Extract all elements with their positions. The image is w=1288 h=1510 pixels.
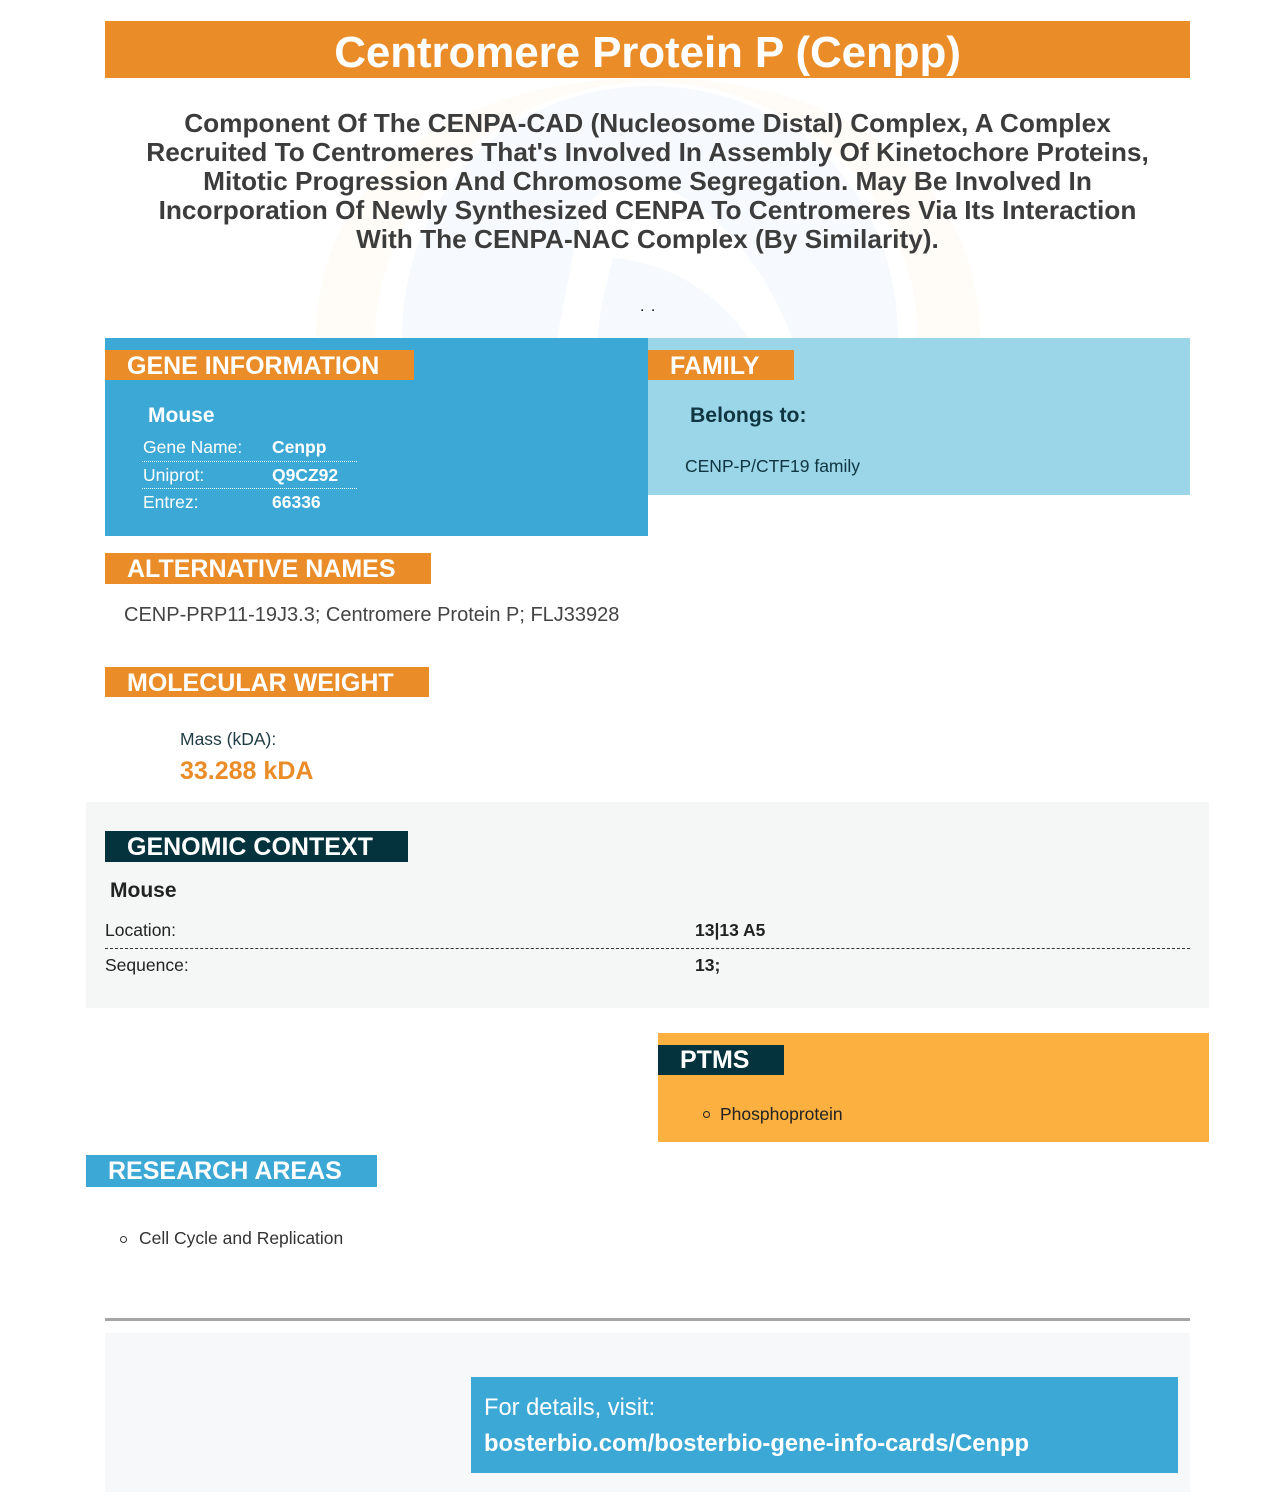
mass value: 33.288 kDA bbox=[180, 757, 313, 785]
ptm item: Phosphoprotein bbox=[720, 1104, 843, 1124]
heading: ptms: PTMS bbox=[680, 1046, 749, 1074]
panel: family bbox=[648, 338, 1190, 495]
callout label: For details, visit: bbox=[484, 1395, 655, 1421]
heading: family bbox=[648, 350, 794, 380]
entrez row: Entrez: bbox=[143, 492, 198, 512]
uniprot row: Q9CZ92 bbox=[272, 465, 338, 485]
panel: genomic context bbox=[86, 802, 1209, 1008]
gene name row bbox=[142, 434, 357, 462]
panel: footer bbox=[105, 1333, 1190, 1492]
species label: Mouse bbox=[148, 404, 215, 427]
callout url: bosterbio.com/bosterbio-gene-info-cards/Cenpp bbox=[484, 1430, 1029, 1457]
description bbox=[146, 108, 1149, 254]
ptm bullet bbox=[703, 1111, 710, 1118]
heading: genomic context: GENOMIC CONTEXT bbox=[127, 833, 373, 861]
uniprot row bbox=[142, 462, 357, 489]
callout: details link bbox=[471, 1377, 1178, 1473]
description: Mitotic Progression And Chromosome Segregation. May Be Involved In bbox=[203, 166, 1092, 196]
title banner bbox=[105, 21, 1190, 78]
location row bbox=[105, 916, 1190, 949]
belongs to label: Belongs to: bbox=[690, 404, 807, 427]
family name: CENP-P/CTF19 family bbox=[685, 456, 860, 476]
heading: gene information: GENE INFORMATION bbox=[127, 352, 379, 380]
gene name row: Cenpp bbox=[272, 437, 326, 457]
species label: Mouse bbox=[110, 879, 177, 902]
footer rule bbox=[105, 1318, 1190, 1321]
entrez row: 66336 bbox=[272, 492, 321, 512]
location row: 13|13 A5 bbox=[695, 920, 765, 940]
title banner: Centromere Protein P (Cenpp) bbox=[334, 28, 961, 77]
heading: molecular weight: MOLECULAR WEIGHT bbox=[127, 669, 394, 697]
description: Recruited To Centromeres That's Involved In Assembly Of Kinetochore Proteins, bbox=[146, 137, 1149, 167]
separator dots: . . bbox=[640, 298, 655, 315]
heading: research areas: RESEARCH AREAS bbox=[108, 1157, 342, 1185]
sequence row bbox=[105, 955, 720, 975]
background watermark bbox=[402, 86, 898, 338]
mass label: Mass (kDA): bbox=[180, 729, 276, 749]
description: Incorporation Of Newly Synthesized CENPA To Centromeres Via Its Interaction bbox=[159, 195, 1136, 225]
sequence row: 13; bbox=[695, 955, 720, 975]
uniprot row: Uniprot: bbox=[143, 465, 204, 485]
panel: gene information bbox=[105, 338, 648, 536]
research area bullet bbox=[120, 1236, 127, 1243]
panel: ptms bbox=[658, 1033, 1209, 1142]
heading: alternative names: ALTERNATIVE NAMES bbox=[127, 555, 396, 583]
location row: Location: bbox=[105, 920, 176, 940]
alternative names text: CENP-PRP11-19J3.3; Centromere Protein P; FLJ33928 bbox=[124, 604, 619, 626]
heading: family: FAMILY bbox=[670, 352, 759, 380]
gene name row: Gene Name: bbox=[143, 437, 242, 457]
sequence row: Sequence: bbox=[105, 955, 189, 975]
description: Component Of The CENPA-CAD (Nucleosome Distal) Complex, A Complex bbox=[184, 108, 1111, 138]
research area item: Cell Cycle and Replication bbox=[139, 1228, 343, 1248]
entrez row bbox=[143, 492, 321, 512]
heading: ptms bbox=[658, 1045, 784, 1075]
description: With The CENPA-NAC Complex (By Similarity). bbox=[356, 224, 939, 254]
